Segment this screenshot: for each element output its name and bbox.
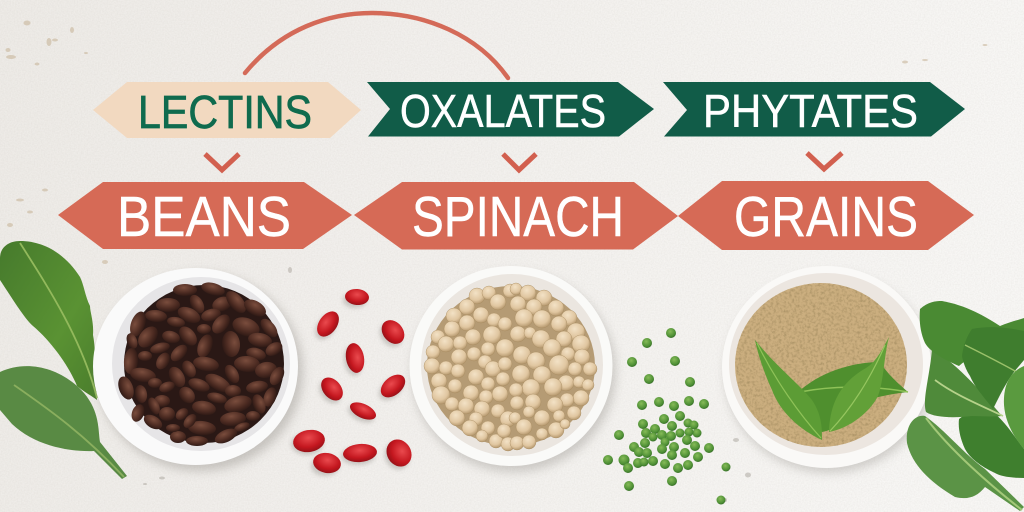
label: grains (678, 181, 974, 250)
photo: left leaves (0, 241, 127, 479)
arrow: lectins to beans (205, 154, 239, 170)
photo: bowl of ground grains (722, 266, 933, 473)
photo: bowl of black beans (93, 268, 303, 471)
photo: right spinach leaves (907, 301, 1024, 511)
herb leaves on grains (755, 337, 908, 440)
label: oxalates: OXALATES (400, 85, 606, 137)
label: spinach: SPINACH (412, 185, 624, 249)
photo: bowl of chickpeas (410, 266, 616, 472)
arrow: oxalates to spinach (503, 154, 536, 170)
label: beans: BEANS (117, 185, 291, 249)
label: phytates: PHYTATES (703, 85, 918, 137)
label: lectins (93, 82, 361, 138)
arrow: phytates to grains (807, 153, 842, 169)
photo: scattered red beans (291, 288, 416, 476)
label: grains: GRAINS (734, 185, 918, 249)
decorative connector arc (245, 13, 508, 78)
label: lectins: LECTINS (138, 86, 312, 138)
label: beans (58, 182, 352, 249)
photo: scattered green peas (603, 328, 730, 504)
